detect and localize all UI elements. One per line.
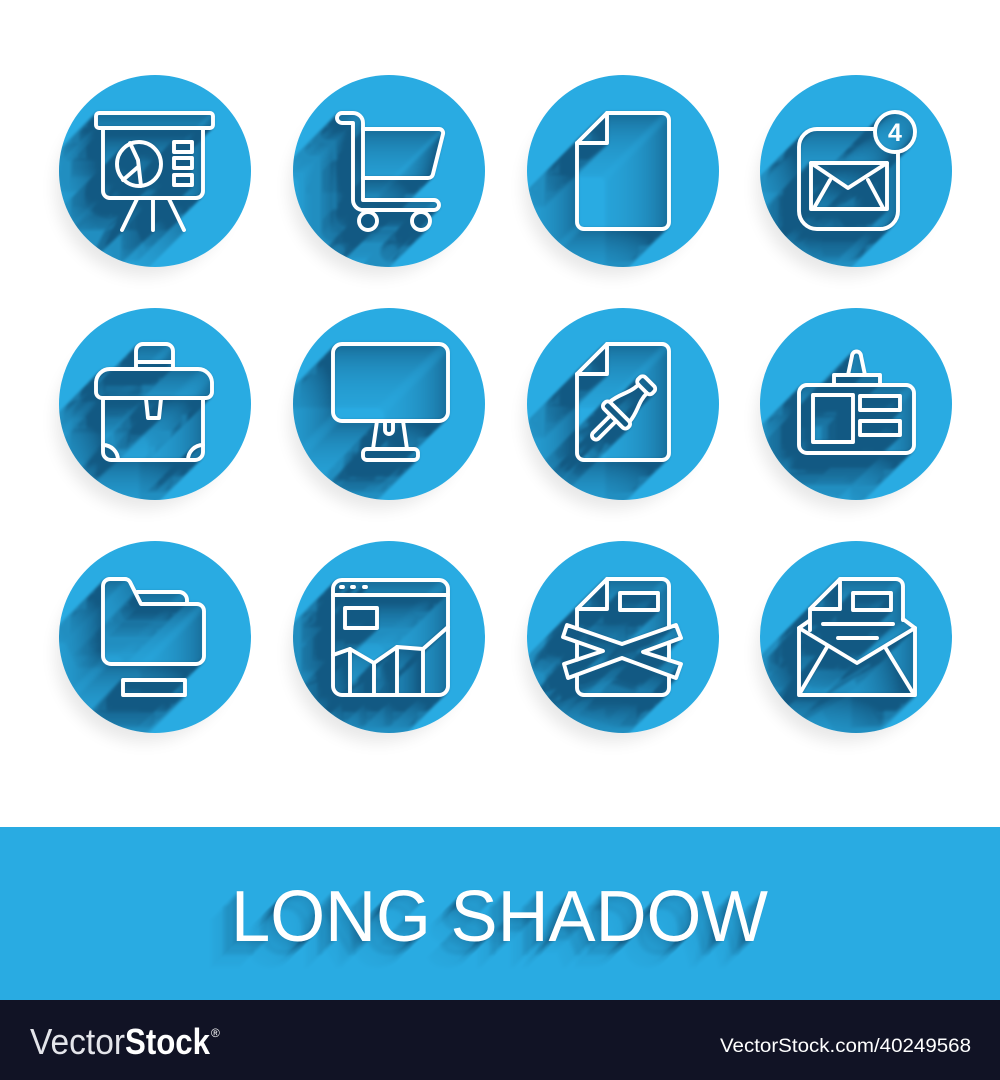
footer: dark brand bar — [0, 1000, 1000, 1080]
logo: VectorStock wordmark — [30, 1021, 220, 1062]
icon: folder in circle — [56, 541, 251, 742]
title shadow: LONG SHADOW — [231, 877, 768, 957]
icon: mail notification in circle — [757, 75, 952, 276]
icon: browser window with chart in circle — [290, 541, 485, 742]
title: LONG SHADOW — [231, 877, 768, 957]
icon: mail notification in circle: 4 — [888, 119, 902, 147]
icon: open envelope with letter in circle — [757, 541, 952, 742]
icon: blank document in circle — [524, 75, 719, 276]
icon: document crossed with tape in circle — [524, 541, 719, 742]
icon: ID badge in circle — [757, 308, 952, 509]
icon: presentation board in circle — [56, 75, 251, 276]
banner: blue title band — [0, 827, 1000, 1000]
logo: VectorStock wordmark: ® — [211, 1026, 220, 1040]
footer text: image reference: VectorStock.com/40249568 — [720, 1036, 971, 1057]
icon: shopping cart in circle — [290, 75, 485, 276]
logo: VectorStock wordmark: Vector — [30, 1021, 125, 1062]
icon: computer monitor in circle — [290, 308, 485, 509]
icon: document with push pin in circle — [524, 308, 719, 509]
logo: VectorStock wordmark: Stock — [125, 1021, 211, 1062]
icon: briefcase in circle — [56, 308, 251, 509]
